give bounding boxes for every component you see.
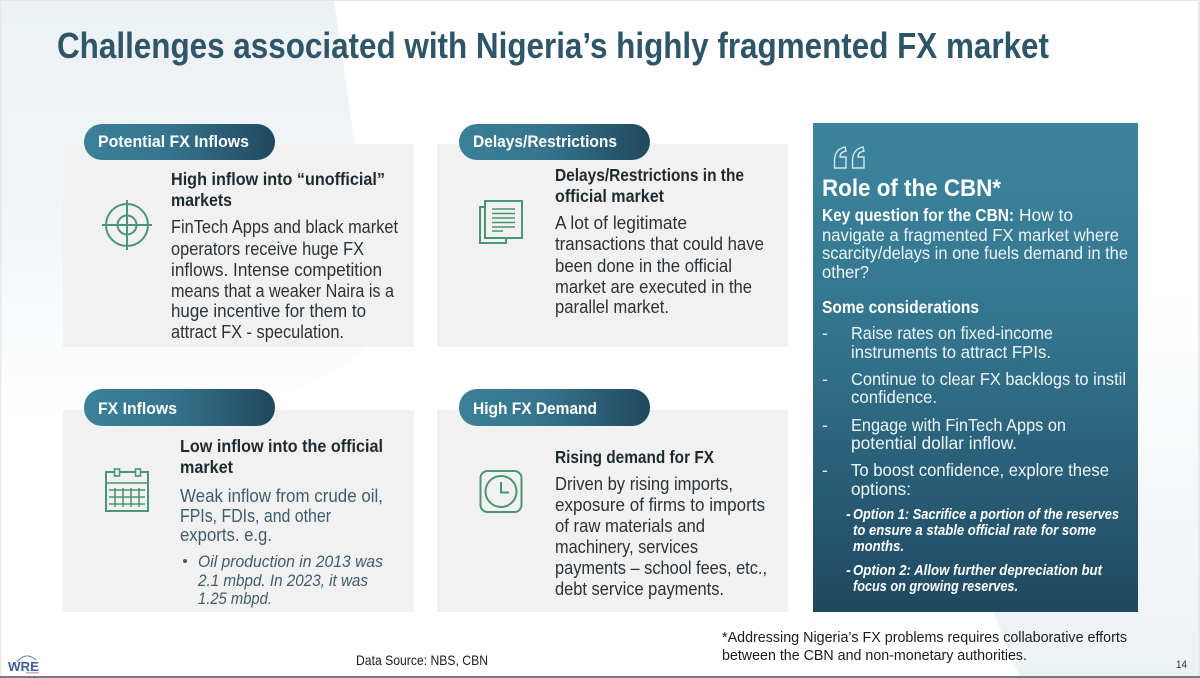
list: considerations: Engage with FinTech Apps on [851, 415, 1066, 435]
text: rising demand for FX: exposure of firms to imports [555, 495, 765, 515]
text: low inflow into the official market: 2.1 mbpd. In 2023, it was [197, 571, 368, 590]
list: options: - [846, 563, 851, 579]
text: key question: navigate a fragmented FX market where [822, 225, 1119, 245]
heading: role of the CBN: Role of the CBN* [822, 175, 1002, 202]
list: considerations: options: [851, 479, 911, 499]
text: delays in the official market: parallel market. [555, 297, 669, 317]
text: rising demand for FX: debt service payments. [555, 579, 724, 599]
list: options [846, 507, 1119, 595]
footnote: between the CBN and non-monetary authorities. [722, 647, 1027, 664]
text: rising demand for FX: payments – school fees, etc., [555, 558, 767, 578]
list: options: months. [853, 539, 904, 555]
logo: WRE: WRE [8, 659, 39, 674]
page number: 14 [1176, 659, 1187, 671]
pill heading: FX inflows [84, 389, 275, 426]
text: key question: other? [822, 262, 869, 282]
pill heading: high FX demand: High FX Demand [473, 399, 597, 418]
panel: FX inflows [63, 389, 414, 612]
list: considerations: - [822, 460, 828, 480]
list: options: - [846, 507, 851, 523]
list: options: focus on growing reserves. [853, 579, 1018, 595]
text: low inflow into the official market [180, 436, 383, 608]
text: low inflow into the official market: Oil production in 2013 was [198, 552, 383, 571]
panel: potential FX inflows [63, 124, 414, 347]
pill heading: high FX demand [459, 389, 650, 426]
text: key question: Key question for the CBN: [822, 205, 1014, 225]
text: key question: How to [1019, 205, 1073, 225]
text: high inflow into unofficial markets [171, 169, 398, 342]
panel: delays and restrictions [437, 124, 788, 347]
icon: quotation marks [834, 147, 864, 168]
list: considerations: Raise rates on fixed-income [851, 323, 1053, 343]
icon: target [102, 200, 152, 250]
text: rising demand for FX [555, 447, 767, 599]
text: low inflow into the official market: Low inflow into the official [180, 436, 383, 456]
heading: some considerations: Some considerations [822, 297, 979, 317]
pill heading: FX inflows: FX Inflows [98, 399, 177, 418]
list: considerations [822, 323, 1126, 499]
footnote: *Addressing Nigeria’s FX problems requires collaborative efforts [722, 629, 1127, 646]
text: delays in the official market: A lot of legitimate [555, 213, 687, 233]
text: high inflow into unofficial markets: attract FX - speculation. [171, 322, 344, 342]
text: high inflow into unofficial markets: inflows. Intense competition [171, 260, 382, 280]
footnote [722, 629, 1127, 664]
pill heading: delays and restrictions [459, 124, 650, 160]
icon: documents [480, 201, 522, 243]
list: options: Option 1: Sacrifice a portion of the reserves [853, 507, 1119, 523]
text: high inflow into unofficial markets: High inflow into “unofficial” [171, 169, 385, 189]
text: low inflow into the official market: exports. e.g. [180, 525, 272, 545]
panel: role of the CBN [813, 123, 1138, 612]
text: low inflow into the official market: Weak inflow from crude oil, [180, 486, 383, 506]
text: high inflow into unofficial markets: huge incentive for them to [171, 301, 366, 321]
text: delays in the official market: market are executed in the [555, 277, 752, 297]
icon: clock [480, 471, 522, 512]
text: high inflow into unofficial markets: FinTech Apps and black market [171, 217, 398, 237]
text: rising demand for FX: machinery, services [555, 537, 698, 557]
text: key question [822, 205, 1128, 282]
list: options: to ensure a stable official rate for some [853, 523, 1096, 539]
title: Challenges associated with Nigeria’s highly fragmented FX market [57, 25, 1049, 66]
pill heading: delays and restrictions: Delays/Restrictions [473, 132, 617, 151]
text: delays in the official market [555, 165, 764, 317]
text: low inflow into the official market: 1.25 mbpd. [198, 589, 272, 608]
pill heading: potential FX inflows: Potential FX Inflows [98, 132, 249, 151]
text: delays in the official market: Delays/Restrictions in the [555, 165, 744, 185]
text: high inflow into unofficial markets: markets [171, 190, 232, 210]
text: high inflow into unofficial markets: operators receive huge FX [171, 239, 364, 259]
list: considerations: - [822, 415, 828, 435]
list: considerations: instruments to attract FPIs. [851, 342, 1051, 362]
panel: high FX demand [437, 389, 788, 612]
list: considerations: potential dollar inflow. [851, 433, 1017, 453]
list: options: Option 2: Allow further depreciation but [853, 563, 1103, 579]
text: key question: scarcity/delays in one fuels demand in the [822, 243, 1128, 263]
list: considerations: - [822, 323, 828, 343]
list: considerations: - [822, 369, 828, 389]
icon: calendar [106, 469, 148, 511]
text: high inflow into unofficial markets: means that a weaker Naira is a [171, 281, 395, 301]
text: delays in the official market: been done in the official [555, 256, 732, 276]
pill heading: potential FX inflows [84, 124, 275, 160]
text: rising demand for FX: Rising demand for FX [555, 447, 714, 467]
text: low inflow into the official market: FPIs, FDIs, and other [180, 506, 331, 526]
text: low inflow into the official market: market [180, 457, 233, 477]
text: delays in the official market: official market [555, 186, 664, 206]
list: considerations: confidence. [851, 387, 937, 407]
list: considerations: To boost confidence, explore these [851, 460, 1109, 480]
text: rising demand for FX: Driven by rising imports, [555, 474, 733, 494]
text: rising demand for FX: of raw materials and [555, 516, 705, 536]
data source: Data Source: NBS, CBN [356, 652, 488, 668]
list: considerations: Continue to clear FX backlogs to instil [851, 369, 1126, 389]
text: delays in the official market: transactions that could have [555, 234, 764, 254]
